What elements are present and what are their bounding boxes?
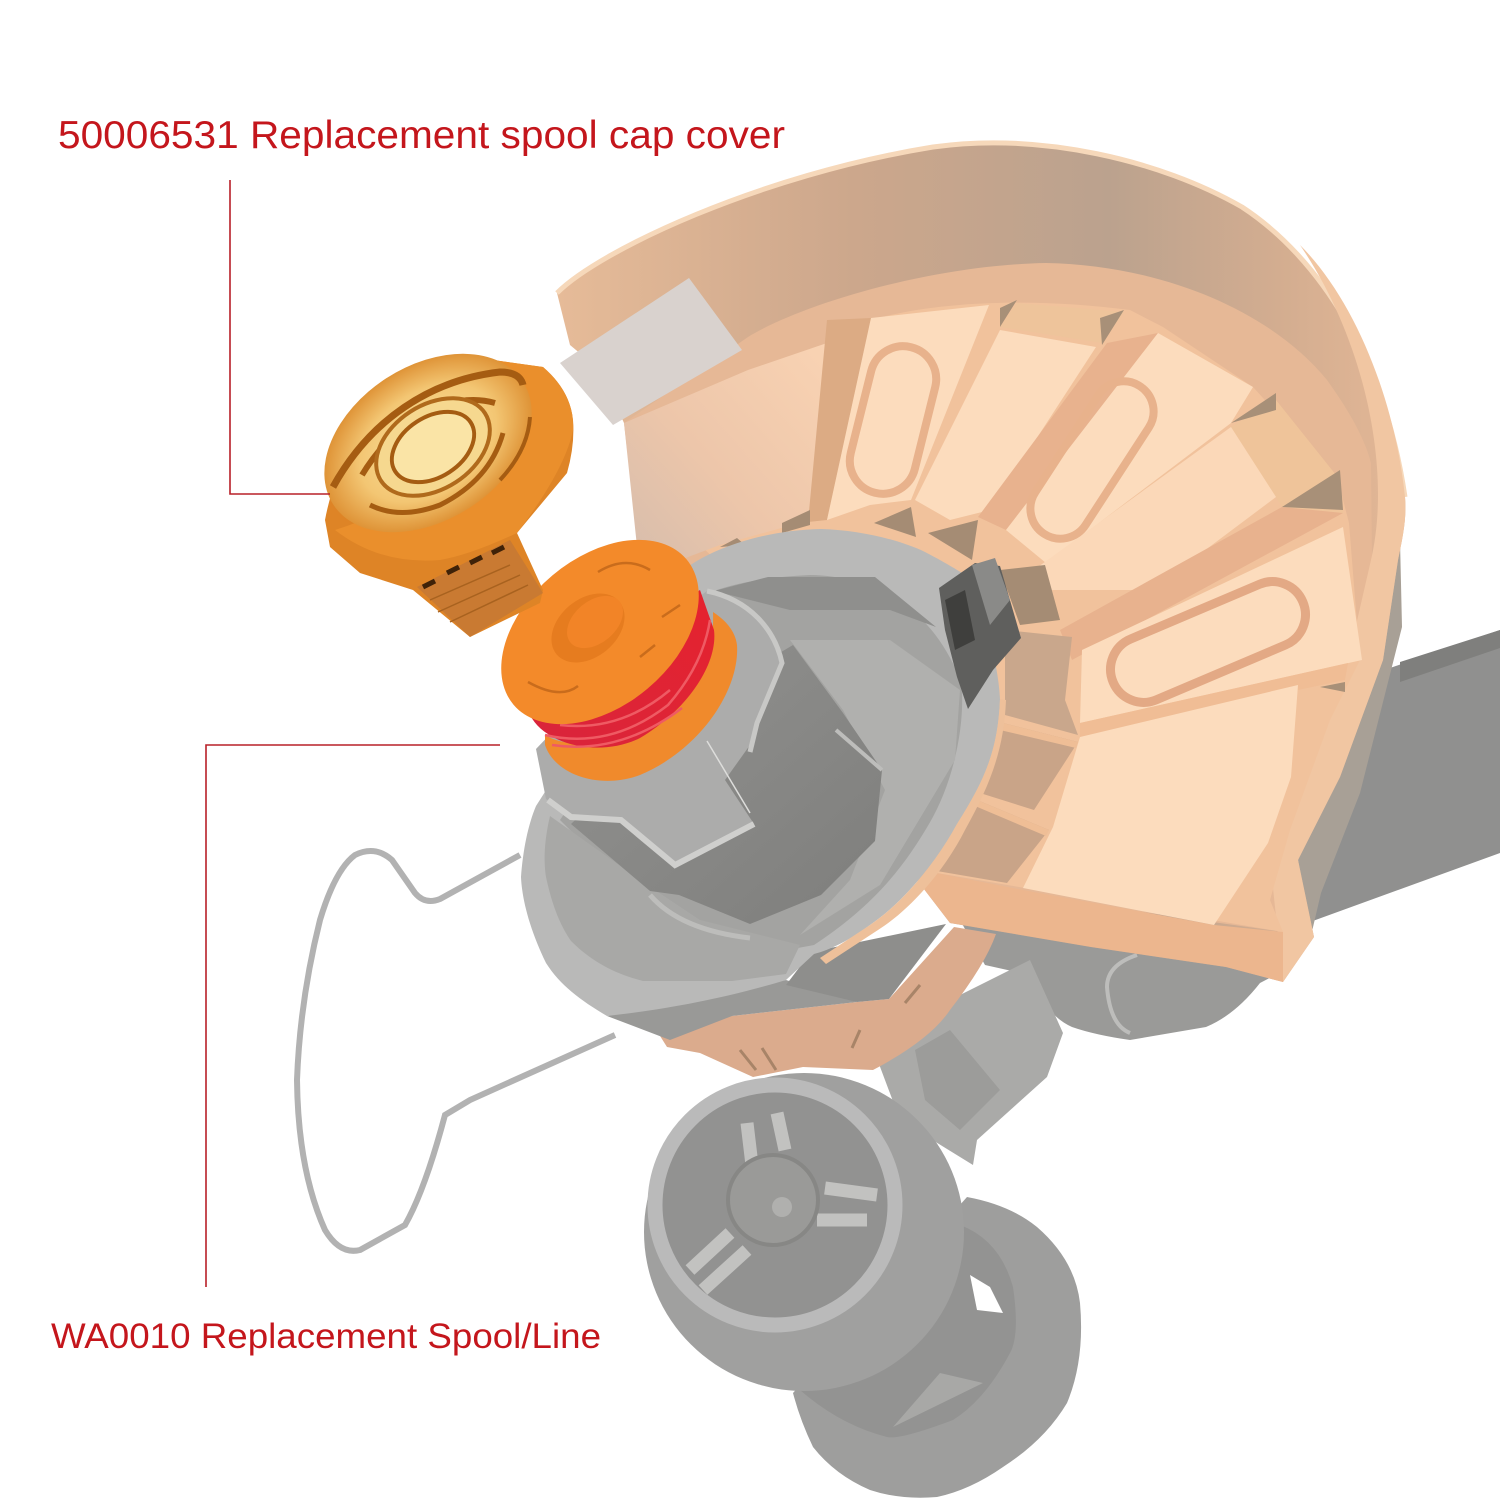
trimmer wire guide [297, 851, 615, 1251]
label: spool cap cover: 50006531 Replacement spool cap cover [58, 114, 785, 157]
guard left wall [624, 343, 827, 575]
front wheel [644, 1073, 964, 1391]
guard outer shell [557, 143, 1405, 982]
rear wheel [793, 1197, 1081, 1498]
guard tab [560, 278, 742, 425]
latch [939, 558, 1021, 709]
leader line: spool/line [206, 745, 500, 1287]
grey spool housing disc [521, 529, 1006, 1040]
orange lower motor body [650, 927, 996, 1077]
leader line: spool cap cover [230, 180, 330, 494]
guard inner ribs and panels [808, 300, 1362, 925]
gear housing [870, 960, 1063, 1165]
replacement spool with red line [466, 503, 737, 781]
motor cylinder [960, 920, 1285, 1040]
label: spool and line: WA0010 Replacement Spool/Line [51, 1317, 601, 1356]
trimmer shaft [1298, 540, 1500, 940]
spool holder column [536, 591, 882, 938]
steps inside guard [720, 507, 1078, 883]
spool cap cover [291, 317, 573, 637]
